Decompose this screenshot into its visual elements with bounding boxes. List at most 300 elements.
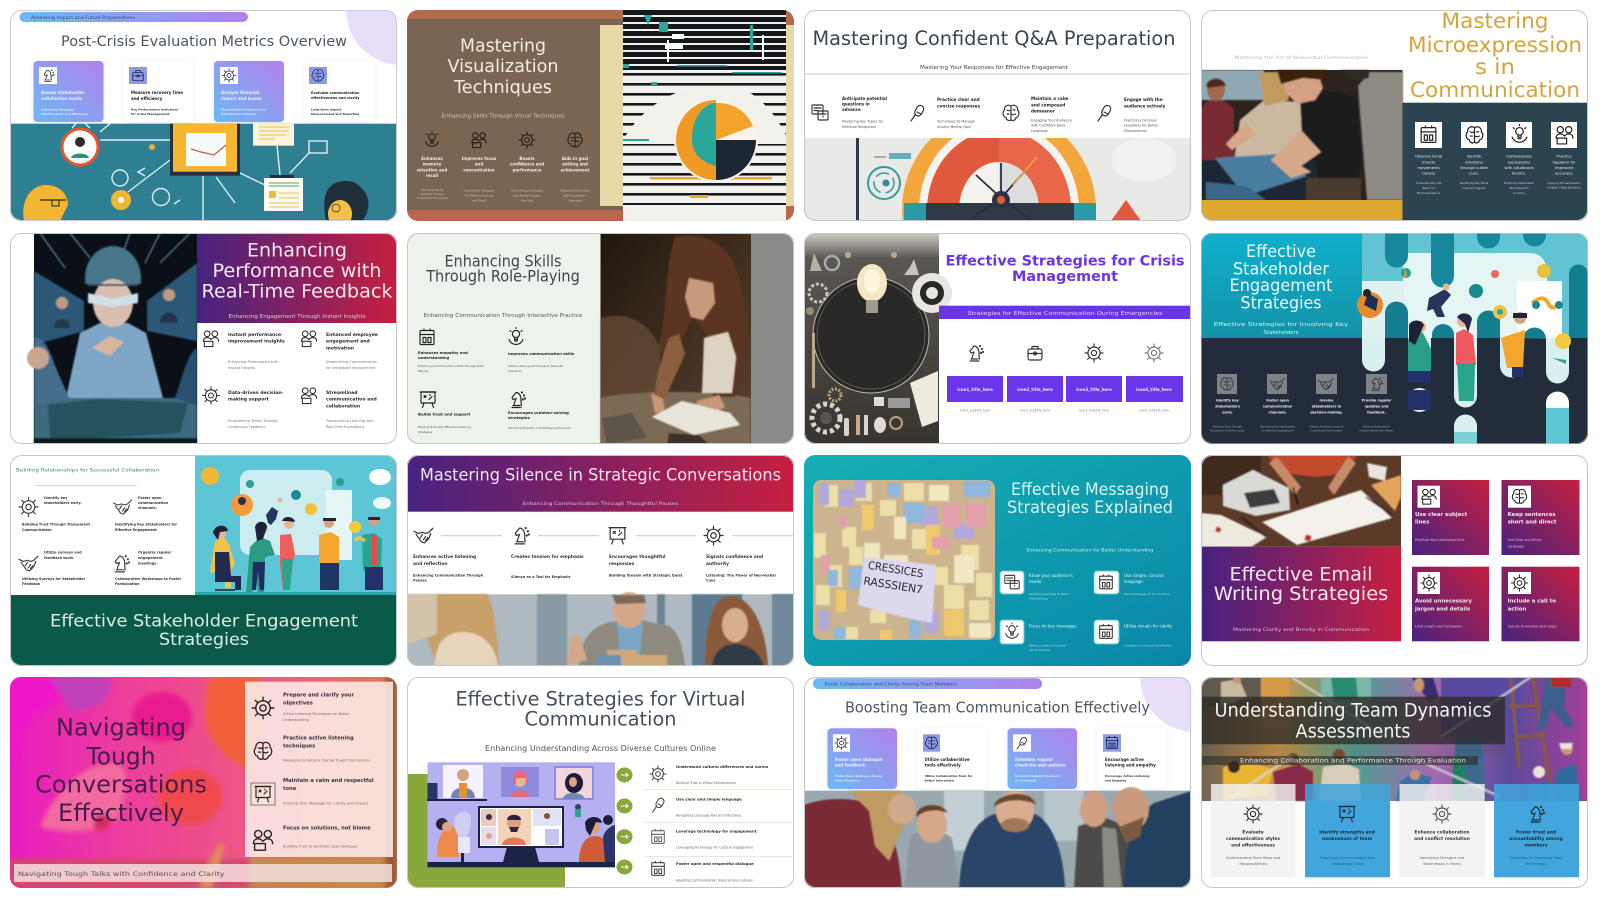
step 4 (1547, 122, 1581, 190)
item 1: Mastering Key Topics for (842, 120, 884, 124)
step 3: Contextualize (1506, 154, 1533, 159)
item 4: Practicing Common (1124, 118, 1157, 122)
card 2: weaknesses of team (1322, 836, 1373, 842)
strategy 2: Identifying Key Stakeholders for (115, 523, 177, 527)
item 4 (1098, 97, 1166, 133)
card 1: lines (1415, 520, 1429, 526)
benefit 2: for Immediate Improvement (326, 366, 376, 370)
point 1: Pauses (413, 579, 427, 583)
step 3: with situational (1504, 165, 1534, 170)
norm 1: Building Trust in Virtual Environments (676, 781, 736, 785)
card 2: Enhancing Communication and (1320, 856, 1374, 860)
item 1: questions in (842, 102, 870, 107)
column 1 (947, 346, 1003, 413)
background: face and speech bubbles (10, 677, 397, 888)
point 4: Cues (706, 579, 716, 583)
rising columns (1385, 264, 1588, 339)
stakeholder action 2 (1260, 374, 1296, 433)
benefit 2: engagement and (326, 339, 370, 345)
stakeholder action 3: Involve (1320, 399, 1334, 403)
step 4: Insights in Real Situations (1547, 186, 1581, 190)
skill 2 (508, 328, 575, 373)
photo: writing at desk (1201, 455, 1401, 547)
step 2: Cues and Signals (1462, 186, 1486, 190)
column 2: icon2_subtitle_here (1020, 409, 1050, 413)
slide: Effective Messaging Strategies Explained (804, 455, 1191, 666)
step 1: Understanding (283, 718, 309, 722)
steps panel (245, 682, 393, 857)
stakeholder action 3 (1309, 374, 1345, 433)
header panel: Enhancing Engagement Through Instant Insights (228, 314, 366, 320)
skill 3 (418, 392, 471, 434)
benefit 1: Potential Through (421, 192, 444, 196)
card 2 (1502, 480, 1580, 555)
stakeholder action 4: Diverse Stakeholder Needs (1360, 429, 1394, 433)
stakeholder action 2: Identifying Key Stakeholders (1260, 425, 1296, 429)
photo: sticky note wall: CRESSICES (867, 559, 924, 580)
step 3: Accuracy (1513, 191, 1526, 195)
point 4: Signals confidence and (706, 554, 763, 560)
item 1: advance (842, 107, 861, 112)
tip 1: Simplifying Language for Better (1029, 592, 1070, 596)
norm 2 (653, 796, 742, 818)
photo: lightbulb and gears flat lay (804, 233, 952, 444)
step 4: Practice (1556, 154, 1572, 159)
benefit 3: Overcoming Challenges (511, 188, 544, 192)
stakeholder action 1: stakeholders (1215, 404, 1240, 408)
step 1: movements (1417, 165, 1440, 170)
slide: Boosting Team Communication Effectively (804, 622, 1250, 888)
step 4: Building Trust to Facilitate Open Dialogue (283, 844, 358, 848)
subtitle: Mastering the Art of Nonverbal Communication (1234, 55, 1369, 61)
benefit 1: memory (423, 162, 442, 167)
photo: woman at desk (600, 233, 751, 444)
step 1: Basics of (1423, 186, 1435, 190)
step 2: emotions (1465, 159, 1483, 164)
title: Effective Strategies for Virtual (456, 688, 746, 711)
slide: Mastering Confident Q&A Preparation (804, 10, 1191, 221)
title: Stakeholder (1233, 259, 1329, 278)
benefit 3: Empowering Teams Through (228, 419, 278, 423)
tip 3: Focus on key messages. (1029, 624, 1078, 629)
benefit 2: Streamlining Communication (326, 360, 377, 364)
item 3: and composed (1031, 102, 1065, 108)
subtitle: Enhancing Communication for Better Understanding (1026, 548, 1154, 554)
step 1: objectives (283, 700, 313, 706)
title: Conversations (35, 770, 207, 798)
benefit 3 (510, 132, 544, 202)
strategy 1 (19, 496, 90, 532)
card 2: Identify strengths and (1319, 829, 1375, 835)
card 2: Utilize collaborative (924, 757, 970, 762)
stakeholder action 3: Continuous Improvement (1311, 429, 1342, 433)
card 3: Satisfaction Analysis (221, 112, 257, 116)
card 2: tools effectively (924, 763, 961, 768)
card 1: Effectiveness and Efficiency (41, 112, 88, 116)
slide: Mastering Visualization Techniques (407, 10, 794, 221)
slide: Effective Stakeholder Engagement Strategies (green) (10, 455, 397, 666)
benefit 4: setting and (562, 162, 588, 167)
strategy 3 (19, 551, 86, 586)
stakeholder action 4: updates and (1365, 404, 1389, 408)
benefit 3 (202, 387, 284, 429)
card 1: Foster Open Dialogue Among (835, 774, 882, 778)
step 3: factors. (1512, 171, 1526, 176)
tip 2: language. (1124, 579, 1144, 584)
stakeholder action 2: Foster open (1266, 399, 1290, 403)
strategy 2: communication (138, 501, 169, 505)
column 2 (1007, 346, 1063, 413)
card 3: impact and losses (221, 96, 262, 101)
stakeholder action 1: Transparent Communication (1210, 429, 1246, 433)
benefit 1: Enhances (421, 156, 443, 161)
title: Effectively (58, 799, 184, 827)
card 2: Keep sentences (1508, 512, 1556, 518)
step 2: through subtle (1460, 165, 1489, 170)
step 4: Focus on solutions, not blame (283, 825, 371, 831)
item 4: Questions for Better (1124, 124, 1159, 128)
card 2 (917, 728, 987, 789)
card 4 (1502, 567, 1580, 641)
step 1: Understanding the (1416, 181, 1441, 185)
step 3: Practicing Observation (1504, 181, 1535, 185)
card 2: Use Clear and Direct (1508, 538, 1542, 542)
stakeholder action 1: early. (1222, 410, 1233, 414)
image: striped pie chart (623, 10, 786, 221)
card 1: Foster open dialogue (835, 757, 883, 762)
card 2: Better Interaction (924, 779, 954, 783)
benefit 4: Exercises (569, 198, 582, 202)
item 2: Practice clear and (937, 97, 980, 102)
benefit 4: Aids in goal (562, 156, 589, 161)
title panel: Mastering Clarity and Brevity in Communication (1233, 627, 1369, 633)
card 3: Limit Length and Complexity (1415, 625, 1463, 629)
norm 1: Understand cultural differences and norms (676, 764, 769, 769)
card 4: Encourage Active Listening (1105, 774, 1149, 778)
photo: woman with visor (27, 233, 197, 444)
benefit 3: Continuous Feedback (228, 425, 267, 429)
step 1 (1415, 122, 1442, 195)
subtitle: Effective Strategies for Involving Key (1214, 322, 1348, 328)
title: s in (1475, 55, 1515, 79)
card 2: for Crisis Management (131, 112, 170, 116)
strategy 1: stakeholders early. (44, 501, 82, 505)
step 3: Framing Your Message for Clarity and Impact (283, 800, 369, 805)
card 3: for Feedback (1015, 779, 1036, 783)
step 1: closely. (1422, 171, 1436, 176)
title panel: Writing Strategies (1214, 583, 1388, 605)
card 1 (1211, 784, 1296, 877)
benefit 3: confidence and (510, 162, 544, 167)
tip 4 (1094, 620, 1173, 648)
benefit 1: retention and (417, 167, 448, 172)
photo: team around table (804, 787, 1191, 888)
tip 4: Consistency in Tone and Style Matters (1124, 644, 1172, 648)
column 1: icon1_subtitle_here (960, 409, 990, 413)
tagline: Building Relationships for Successful Collaboration (16, 468, 159, 474)
card 2 (123, 61, 193, 122)
bottom tagline (14, 864, 392, 882)
card 1: Prioritize Key Information First (1415, 538, 1465, 542)
skill 1: Enhances empathy and (418, 350, 468, 355)
illustration: gauge (804, 138, 1190, 221)
norm 3 (652, 829, 757, 850)
point 2 (511, 528, 584, 579)
illustration: analytics network (10, 124, 397, 228)
slide: Effective Strategies for Virtual Communication (407, 677, 794, 888)
title band: Assessments (1296, 721, 1410, 742)
title: Engagement (1230, 276, 1333, 295)
skill 3: Building Trust with Effective Listening (418, 425, 471, 429)
point 1 (413, 528, 484, 583)
tip 2 (1094, 571, 1170, 596)
title: Strategies Explained (1007, 498, 1173, 518)
skill 3: Builds trust and support (418, 412, 470, 417)
lower cut-outs (1362, 338, 1569, 444)
item 2: concise responses (937, 104, 981, 109)
step 1: Observe facial (1415, 154, 1442, 159)
benefit 2: and (475, 162, 483, 167)
tip 1: Understanding (1029, 596, 1048, 600)
card 4: members (1524, 843, 1548, 849)
benefit 3: Boosts (519, 156, 535, 161)
benefit 4: Streamlined (326, 390, 358, 396)
skill 2: Active Listening Techniques in Real-Life (508, 364, 563, 368)
photo: sticky note wall (813, 480, 995, 640)
card 4: Measurement and Reporting (311, 112, 359, 116)
benefit 3: making support (228, 397, 270, 403)
slide: Understanding Team Dynamics Assessments (1201, 676, 1588, 888)
step 3: expressions (1508, 159, 1530, 164)
column 3: icon3_subtitle_here (1079, 409, 1109, 413)
step 3: Maintain a calm and respectful (283, 778, 374, 784)
step 2: Identify (1467, 154, 1482, 159)
step 3 (1504, 122, 1535, 195)
step 1 (252, 692, 354, 722)
tip 3: Defining Simple and Creative (1029, 644, 1066, 648)
item 2: Techniques to Manage (936, 120, 975, 124)
strategy 2: Foster open (138, 496, 162, 500)
title band: Understanding Team Dynamics (1214, 701, 1492, 722)
item 1: Anticipate potential (842, 96, 888, 101)
card 3: check-ins and updates (1015, 763, 1066, 768)
item 3: demeanor (1031, 109, 1056, 114)
stakeholder action 2: communication (1263, 404, 1293, 408)
column 1: icon1_title_here (957, 387, 993, 392)
card 3 (1412, 567, 1489, 641)
step 2: techniques (283, 743, 315, 749)
norm 4: Adapting Communication Styles Across Cultures (676, 878, 753, 882)
strategy 1: Building Trust Through Transparent (22, 523, 90, 527)
subtitle: Enhancing Skills Through Visual Techniques (442, 114, 565, 120)
benefit 2: and Recall (472, 198, 486, 202)
benefit 1: recall (426, 173, 439, 178)
skill 4 (508, 392, 571, 430)
card 3: Schedule Regular Check-Ins (1015, 774, 1060, 778)
tip 3 (1000, 620, 1078, 652)
subtitle band: Enhancing Collaboration and Performance Through Evaluation (1240, 757, 1466, 765)
point 3: Encourages thoughtful (609, 554, 666, 560)
strategy 2: Effective Engagement (115, 528, 157, 532)
benefit 2: Improves focus (462, 156, 497, 161)
card 2: Measure recovery time (131, 90, 183, 95)
column 3 (1066, 344, 1122, 413)
point 3 (609, 528, 683, 578)
tip 1: Know your audience's (1029, 573, 1073, 578)
benefit 4: collaboration (326, 403, 360, 409)
strategy 3: Utilizing Surveys for Stakeholder (22, 577, 86, 581)
card 1: Use clear subject (1415, 512, 1468, 518)
card 1: and effectiveness (1231, 843, 1275, 849)
card 4: Strategies for Improving Team (1510, 856, 1563, 860)
header panel: Real-Time Feedback (202, 280, 392, 302)
info panel (1402, 103, 1588, 222)
card 2: and efficiency (131, 96, 163, 101)
norm 3: Leveraging Technology for Cultural Engagement (676, 846, 754, 850)
benefit 3: Data-driven decision- (228, 390, 284, 396)
title: Navigating (56, 714, 186, 742)
step 4: regularly for (1552, 159, 1576, 164)
card 3: Avoid unnecessary (1415, 599, 1473, 605)
point 1: and reflection (413, 561, 447, 567)
benefit 1: Instant performance (228, 332, 281, 338)
step 2: cues. (1469, 171, 1479, 176)
point 2: Silence as a Tool for Emphasis (511, 575, 570, 579)
step 4: Applying Microexpression (1547, 181, 1581, 185)
card 4 (304, 61, 374, 122)
photo: sticky note wall: RASSSIEN7 (862, 574, 924, 597)
stakeholder action 4: Tailoring Strategies to (1363, 425, 1391, 429)
title panel (1201, 547, 1401, 641)
strategy 4: meetings. (138, 561, 158, 565)
stakeholder action 2: for Effective Engagement (1262, 429, 1294, 433)
step 2 (1460, 122, 1489, 190)
card 3: Weaknesses in Teams (1423, 862, 1461, 866)
subtitle band (1201, 756, 1478, 765)
item 2: Anxiety Before Q&A (937, 125, 971, 129)
item 4: Engage with the (1124, 97, 1163, 102)
header (407, 455, 794, 512)
subtitle: Enhancing Understanding Across Diverse Cultures Online (485, 744, 716, 753)
strategy 4: Organize regular (138, 551, 172, 555)
stakeholder action 3: Utilizing Feedback Loops for (1309, 425, 1345, 429)
card 1 (34, 61, 104, 122)
card 4 (1098, 728, 1167, 789)
step 2: Identifying Key Facial (1460, 181, 1488, 185)
norm 2: Use clear and simple language (676, 796, 742, 801)
step 2: Managing Emotions During Tough Discussions (283, 758, 370, 763)
illustration: team with rounded columns (1357, 233, 1588, 444)
item 2 (911, 97, 981, 129)
card 4: Foster trust and (1516, 829, 1556, 835)
card 3: Enhance collaboration (1414, 829, 1470, 835)
benefit 2: for Effective Learning (465, 194, 494, 198)
stakeholder action 4: Provide regular (1362, 399, 1392, 403)
subtitle: Mastering Your Responses for Effective Engagement (920, 65, 1068, 71)
title: Post-Crisis Evaluation Metrics Overview (61, 34, 347, 50)
slide: Post-Crisis Evaluation Metrics Overview (10, 10, 397, 221)
card 4: Performance (1525, 862, 1547, 866)
strategy 3: Utilize surveys and (44, 551, 82, 555)
column 3: icon3_title_here (1076, 387, 1112, 392)
card 3 (214, 61, 284, 122)
card 3: Schedule regular (1015, 757, 1053, 762)
title: Communication (1410, 78, 1580, 102)
stakeholder action 4: feedback. (1367, 410, 1386, 414)
column 2: icon2_title_here (1017, 387, 1053, 392)
benefit 1: Instant Insights (228, 366, 255, 370)
card 1 (828, 728, 897, 789)
step 3 (251, 778, 374, 805)
tag pill (813, 678, 1042, 689)
benefit 1: Visualization Techniques (416, 196, 448, 200)
card 1: communication styles (1226, 836, 1280, 842)
title band: Strategies (159, 630, 249, 650)
skill 4: Practicing Empathy in Role-Playing Exercises (508, 426, 571, 430)
title band (10, 595, 397, 666)
norm 4: Foster open and respectful dialogue (676, 861, 754, 866)
title: Tough (86, 742, 156, 770)
item 4: Preparedness (1124, 129, 1147, 133)
skill 2: Improves communication skills (508, 351, 575, 356)
card 4: listening and empathy (1105, 763, 1156, 768)
tip 1 (1000, 571, 1073, 600)
skill 1 (418, 329, 484, 373)
point 1: Enhances active listening (413, 554, 476, 560)
card 3: Stakeholder Feedback and (221, 108, 266, 112)
benefit 4: achievement (561, 167, 590, 172)
title: Communication (524, 708, 676, 731)
point 4 (704, 526, 776, 583)
card 4 (1494, 784, 1579, 877)
tip 3: Communications (1029, 648, 1051, 652)
card 4: and Empathy (1105, 779, 1127, 783)
slide: Navigating Tough Conversations Effectively (10, 677, 397, 888)
subtitle band (939, 306, 1191, 319)
slide: Effective Stakeholder Engagement Strategies (dark) (1201, 233, 1588, 444)
tip 2: Tailoring Messages to Your Audience (1124, 592, 1170, 596)
subtitle: Enhancing Communication Through Interactive Practice (424, 313, 582, 319)
illustration: team handshake (195, 455, 397, 595)
stakeholder action 1: Identify key (1216, 399, 1240, 403)
point 4: Listening: The Power of Non-Verbal (706, 574, 776, 578)
column 4 (1126, 344, 1183, 413)
tag pill: Boost Collaboration and Clarity Among Team Members (824, 682, 958, 688)
card 3: and conflict resolution (1414, 836, 1470, 842)
card 4: Evaluate communication (311, 91, 360, 95)
card 4: Long-term Impact (311, 108, 342, 112)
step 1: muscle (1422, 159, 1436, 164)
strategy 4: Collaborative Workshops to Foster (115, 577, 181, 581)
point 4: authority (706, 561, 729, 567)
title: Microexpression (1408, 33, 1582, 57)
step 3: Techniques for (1508, 186, 1530, 190)
step 2: Practice active listening (283, 735, 354, 741)
strategy 3: feedback tools. (44, 556, 74, 560)
tip 4: Utilize visuals for clarity. (1124, 624, 1173, 629)
title band: Effective Stakeholder Engagement (50, 612, 358, 632)
slide: Enhancing Skills Through Role-Playing (407, 233, 794, 444)
step 1: Active Listening Techniques for Better (283, 712, 350, 716)
benefit 2: Enhanced employee (326, 332, 378, 338)
header: Mastering Silence in Strategic Conversations (420, 466, 781, 485)
card 2: Collaboration Skills (1330, 862, 1364, 866)
benefit 4 (560, 133, 590, 202)
title: Effective Messaging (1011, 480, 1169, 500)
item 1: Effective Responses (842, 125, 876, 129)
title: Enhancing Skills (444, 252, 562, 271)
card 4: Encourage active (1105, 757, 1144, 762)
